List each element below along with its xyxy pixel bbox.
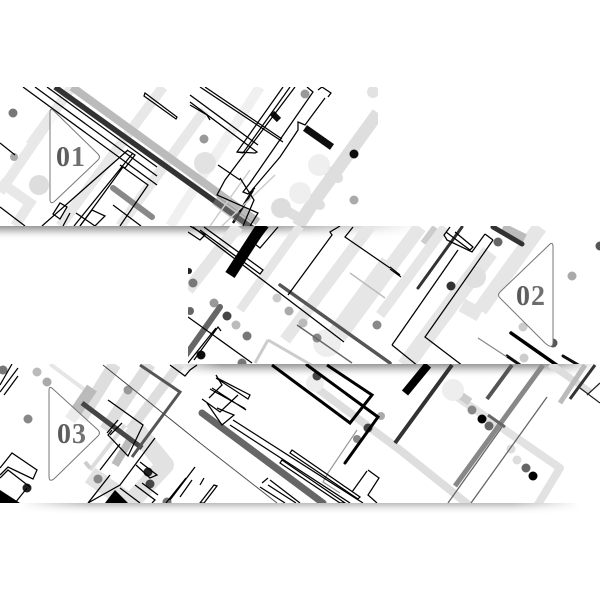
panel 1: technical banner 01 <box>0 86 379 230</box>
heavy strokes <box>186 224 580 366</box>
shadow under panel 2 <box>180 364 596 374</box>
shadow under panel 3 <box>28 503 571 511</box>
thin technical lines <box>0 364 379 503</box>
light diagonal bands <box>0 87 378 226</box>
heavy strokes <box>82 365 600 503</box>
thin technical lines <box>188 226 493 366</box>
thin technical lines <box>0 87 331 226</box>
number 02: 02 <box>516 281 546 312</box>
light diagonal bands <box>50 364 590 506</box>
infographic canvas <box>0 87 600 511</box>
main diagonal strokes <box>55 87 332 230</box>
black blocks <box>0 490 128 503</box>
shadow under panel 1 <box>0 226 406 236</box>
panel 2: technical banner 02 <box>186 224 600 368</box>
circles <box>0 366 538 506</box>
panel 3: technical banner 03 <box>0 364 600 506</box>
number 03: 03 <box>57 419 87 450</box>
triangle badge 02 <box>498 243 553 346</box>
triangle badge 01 <box>50 109 100 203</box>
circles <box>186 238 600 368</box>
light diagonal bands <box>188 226 540 366</box>
number 01: 01 <box>56 142 86 173</box>
gray circles <box>8 86 379 218</box>
triangle badge 03 <box>49 387 100 480</box>
